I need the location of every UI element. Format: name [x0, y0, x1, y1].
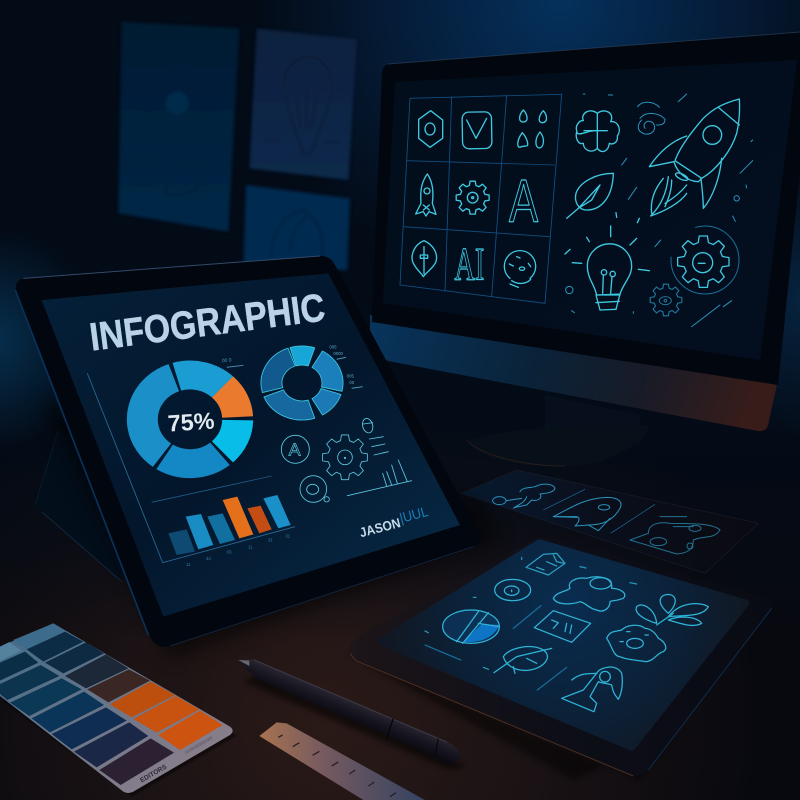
bar labels: 11	[186, 562, 191, 567]
divider	[611, 504, 655, 533]
ring chart	[261, 346, 343, 420]
icon: sprout leaves	[636, 594, 708, 625]
main tablet stand	[35, 430, 140, 582]
icon: gear in circle	[671, 226, 739, 294]
tablet screen	[42, 273, 460, 617]
brand wordmark accent: |UUL	[398, 503, 430, 526]
icon: small rocket	[416, 174, 436, 216]
icon grid lines	[400, 94, 562, 303]
icon: node tree	[493, 484, 555, 508]
bar labels: 11	[248, 545, 253, 550]
monitor chin	[370, 315, 778, 431]
icon: hexagon	[419, 111, 443, 147]
header tab	[13, 623, 65, 649]
icon: document	[526, 553, 565, 575]
icon: egg and lines	[361, 417, 388, 455]
divider	[543, 489, 585, 510]
right swatches	[27, 632, 223, 750]
icon: dial	[495, 579, 531, 601]
pen	[238, 659, 467, 770]
icon: gear	[456, 181, 489, 214]
ring notes: 005	[347, 373, 354, 378]
paper cards on desk	[462, 470, 758, 573]
wall posters	[118, 22, 357, 270]
lower tablet	[347, 537, 773, 780]
icon: large rocket	[649, 99, 740, 216]
icon: letter A: A	[509, 168, 539, 235]
icon: swirl	[638, 102, 665, 134]
colour swatch card	[0, 623, 237, 797]
bar labels: 43	[206, 556, 211, 561]
icon: screen rectangle	[534, 611, 591, 642]
icon: blob	[553, 577, 625, 611]
corner tag	[0, 642, 22, 661]
donut note	[222, 357, 243, 367]
icon: lightbulb	[565, 213, 649, 310]
donut note: 00 0	[222, 357, 232, 364]
icon: split pie	[443, 610, 499, 643]
ring notes: 00	[349, 380, 355, 385]
bar labels: 31	[285, 533, 291, 538]
shadow under main tablet	[40, 400, 500, 660]
icon: clover	[576, 111, 619, 151]
icon: leaf	[412, 241, 437, 277]
icon: small gear	[650, 284, 682, 316]
ring notes: 0000	[333, 351, 344, 356]
icon: ring badge	[300, 476, 329, 502]
shadow	[347, 653, 677, 780]
icon: AI letters: AI	[454, 238, 484, 290]
icon: mini bars	[347, 460, 412, 496]
bar labels: 03	[227, 549, 232, 554]
title: INFOGRAPHIC	[87, 285, 328, 360]
icon: paper blob machine	[630, 517, 720, 554]
monitor	[370, 32, 800, 431]
icon: letter A in circle	[281, 435, 309, 463]
poster: lightbulb sketch	[249, 28, 357, 180]
tablet bezel	[16, 256, 480, 647]
poster: leaf sketch	[243, 185, 350, 270]
bar chart	[168, 495, 291, 555]
decorative dashes and dots	[566, 94, 753, 327]
icon: lamp figure	[562, 667, 622, 712]
monitor bezel	[372, 32, 800, 385]
ring notes	[329, 345, 355, 385]
tablet screen	[382, 543, 745, 747]
card base	[0, 623, 233, 793]
pen body	[239, 659, 462, 764]
card small print: 00000000000000	[184, 735, 214, 755]
axis lines	[87, 373, 295, 563]
monitor stand	[467, 395, 648, 467]
dashes	[425, 557, 637, 690]
donut value: 75%	[167, 407, 215, 437]
icon: check box	[462, 112, 492, 149]
icon: gear	[323, 435, 367, 480]
icon: feather leaf	[567, 173, 613, 218]
icon: paper rocket	[553, 497, 621, 531]
bar labels: 31	[268, 538, 273, 543]
poster: gear sketch	[118, 22, 239, 232]
bar labels	[186, 533, 291, 567]
ring notes: 005	[329, 345, 337, 350]
icon: planet	[504, 251, 536, 287]
icon: letter A in circle: A	[289, 439, 301, 459]
main tablet	[15, 256, 480, 647]
brand wordmark: JASON	[358, 515, 402, 540]
card label: EDITORS	[139, 763, 169, 784]
monitor screen	[383, 60, 797, 360]
tablet body	[349, 537, 773, 776]
donut chart	[123, 357, 257, 482]
icon: four drops	[518, 110, 546, 148]
ruler	[259, 722, 425, 800]
icon: cog blob	[607, 625, 666, 662]
icon: tilted leaf	[494, 647, 552, 673]
left swatches	[0, 652, 174, 785]
